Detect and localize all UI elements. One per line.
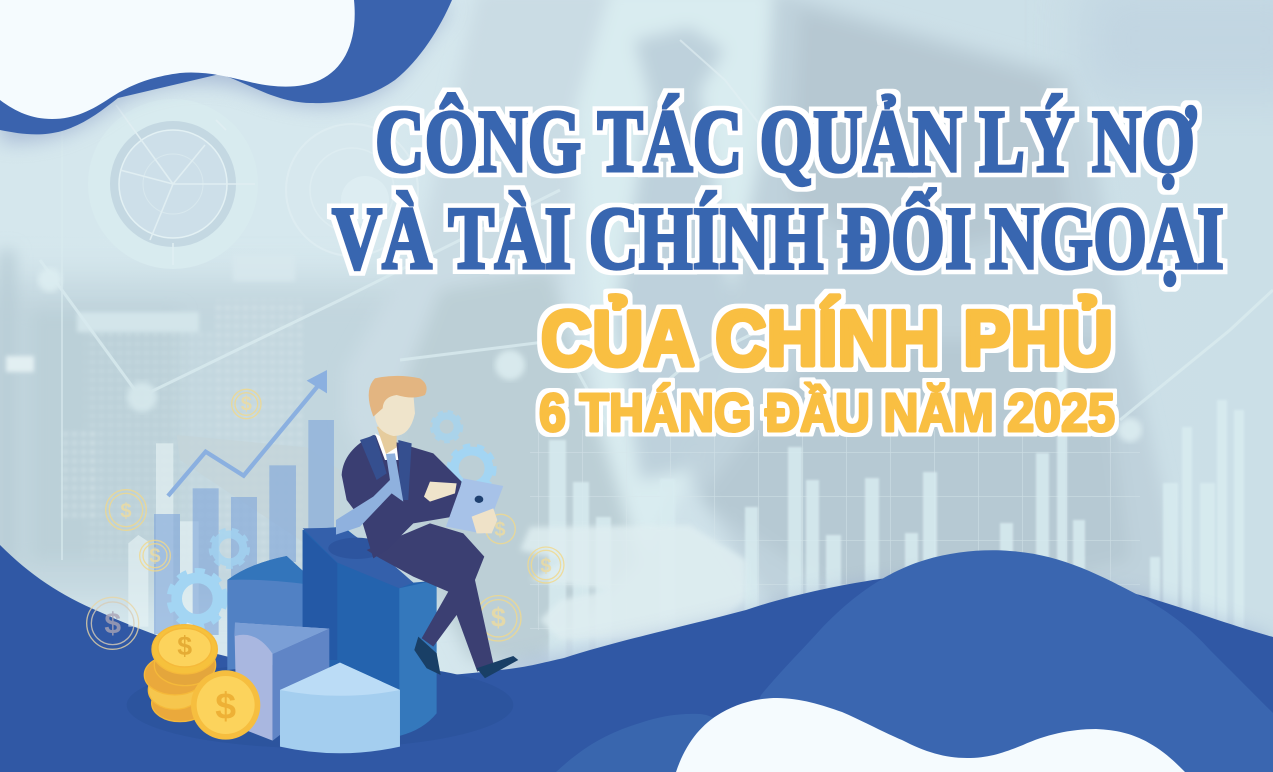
neck and head bbox=[377, 427, 397, 454]
trend arrow bbox=[168, 370, 327, 496]
faint dollar coins: $ bbox=[104, 607, 121, 640]
faint dollar coins: $ bbox=[491, 603, 506, 633]
gold coin stack bbox=[144, 625, 217, 722]
tie bbox=[336, 453, 403, 535]
shoes bbox=[414, 637, 441, 675]
background: clock chart dial bbox=[88, 99, 258, 269]
title line 3: CỦA CHÍNH PHỦ bbox=[541, 294, 1113, 382]
faint dollar coins: $ bbox=[494, 519, 506, 541]
bottom wave: lighter hill bbox=[730, 550, 1273, 772]
blue bar chart bbox=[154, 420, 334, 635]
ground shadow bbox=[127, 662, 513, 748]
faint dollar coins: $ bbox=[241, 394, 252, 416]
faint background columns bbox=[128, 443, 199, 635]
tablet shape behind chart bbox=[177, 435, 340, 567]
background: grid panel bbox=[530, 430, 1140, 630]
gold coin front: $ bbox=[215, 684, 236, 726]
bottom wave: left soft blob bbox=[556, 714, 745, 772]
background: trend lines bbox=[38, 130, 1273, 560]
shadow under bottom wave bbox=[500, 577, 1273, 680]
pie slice: medium blue back bbox=[227, 556, 319, 670]
hands and tablet bbox=[424, 482, 457, 502]
background: bar chart right bbox=[549, 367, 1244, 700]
background: blurred city bbox=[0, 250, 460, 600]
businessman bbox=[336, 376, 518, 678]
background: second dial bbox=[286, 124, 418, 256]
bottom wave: dark blue ground bbox=[0, 545, 1273, 772]
background: businessman suit bbox=[345, 0, 1185, 670]
top-left wave: blue bbox=[0, 0, 452, 134]
bottom wave: white blob bbox=[676, 698, 1185, 772]
legs bbox=[367, 523, 493, 672]
shadow under top wave bbox=[0, 6, 452, 141]
background: open hand bbox=[520, 525, 746, 640]
tie bbox=[615, 27, 735, 480]
pie slice: pale blue front bbox=[280, 663, 400, 753]
title line 4: 6 THÁNG ĐẦU NĂM 2025 bbox=[539, 383, 1115, 443]
gold coin front bbox=[191, 670, 260, 740]
gears bbox=[170, 412, 494, 626]
title bbox=[332, 93, 1224, 443]
left jacket bbox=[345, 0, 611, 670]
right jacket bbox=[690, 0, 1185, 620]
faint dollar coins: $ bbox=[540, 555, 552, 577]
jacket bbox=[342, 435, 462, 558]
pie slice: tall blue bbox=[303, 527, 437, 736]
shirt collar bbox=[375, 433, 398, 460]
shirt bbox=[575, 0, 790, 560]
faint dollar coins bbox=[87, 389, 564, 649]
gold coin stack: $ bbox=[177, 631, 192, 661]
hair bbox=[369, 376, 427, 417]
illustration: businessman on pie chart bbox=[87, 370, 564, 753]
top-left wave: white bbox=[0, 0, 355, 119]
faint dollar coins: $ bbox=[120, 500, 132, 522]
pie slice: lavender front bbox=[235, 623, 329, 741]
faint dollar coins: $ bbox=[149, 545, 161, 567]
